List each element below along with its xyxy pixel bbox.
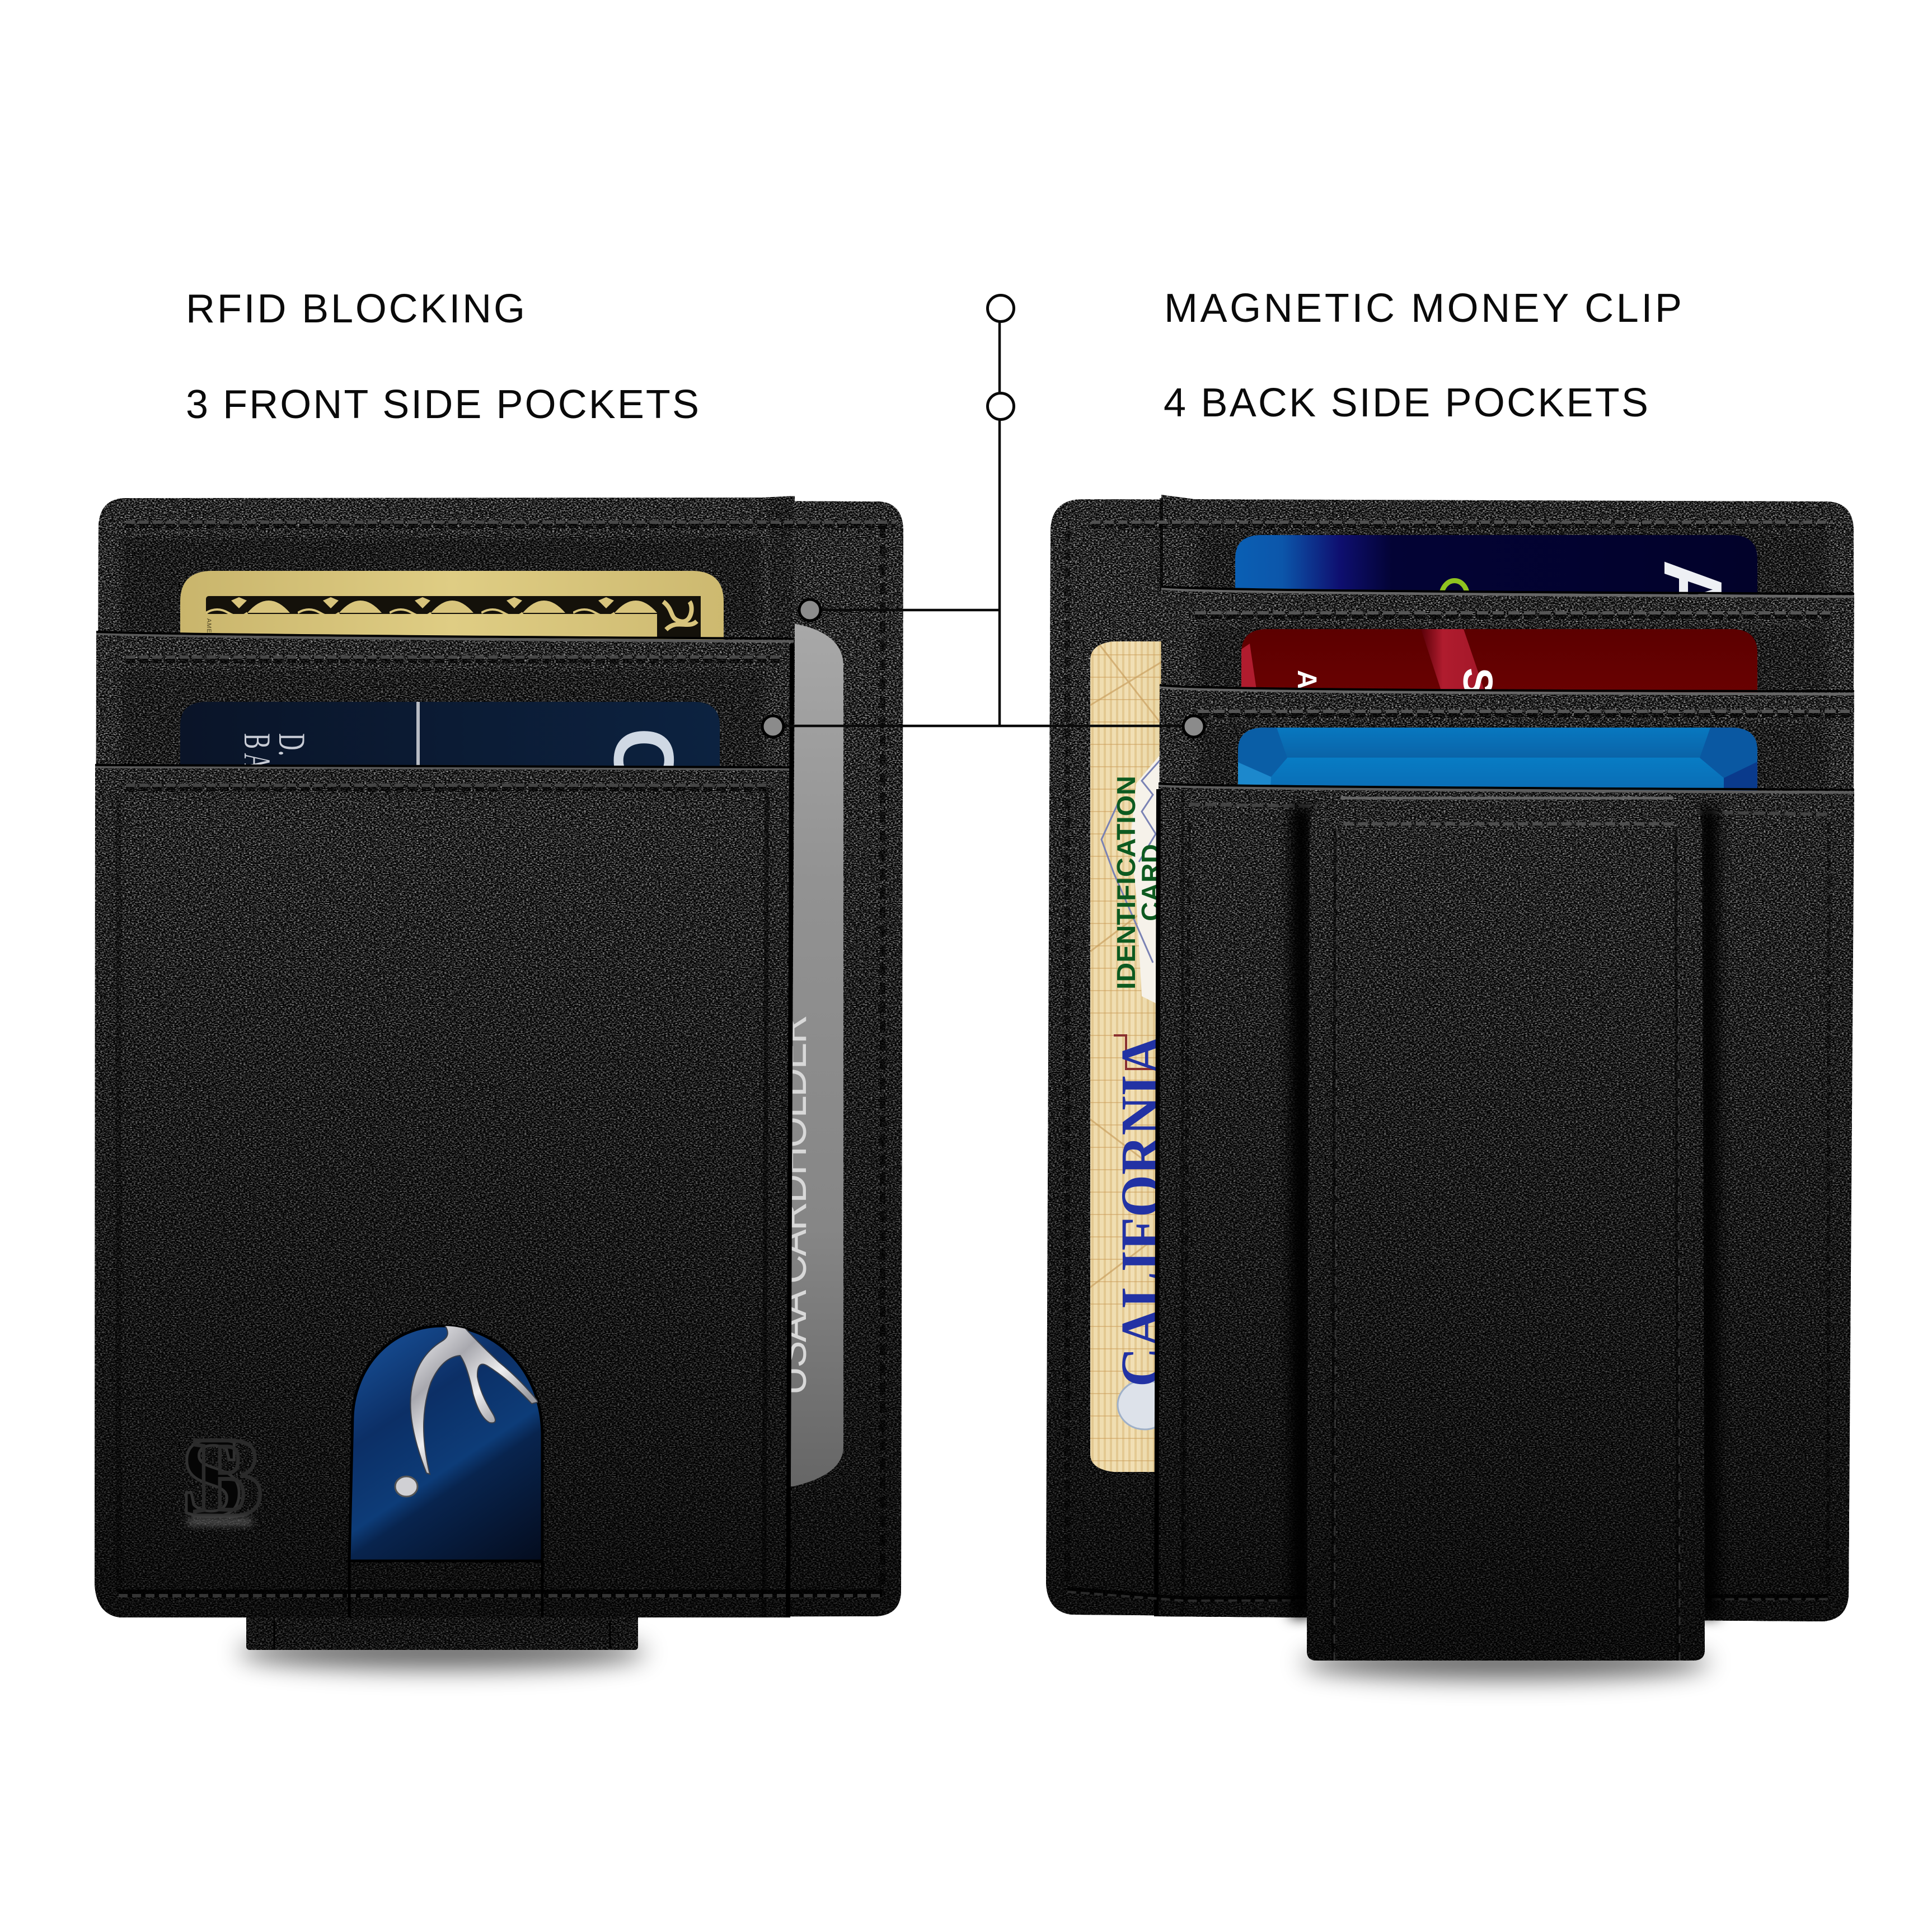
ID card title: IDENTIFICATION xyxy=(1112,776,1141,990)
heading: magnetic money clip: MAGNETIC MONEY CLIP xyxy=(1164,286,1682,331)
dark navy card: BA xyxy=(236,733,278,774)
connector lines and markers xyxy=(762,296,1204,737)
red card: S xyxy=(1455,668,1501,695)
embossed SB logo: B xyxy=(193,1414,263,1541)
middle front pocket xyxy=(95,632,794,1617)
embossed SB logo: S xyxy=(180,1414,244,1541)
thumb slot with blue card xyxy=(349,1324,542,1617)
silver card xyxy=(770,623,843,1486)
dark navy card xyxy=(180,702,720,797)
fold panel base xyxy=(1161,495,1854,599)
red card: A xyxy=(1292,670,1321,690)
connector line: vertical xyxy=(998,322,1001,727)
callout marker: lower ring xyxy=(987,393,1014,420)
right wallet: back side xyxy=(1046,495,1854,1679)
connector line: to lower rivets xyxy=(785,725,1182,727)
money clip shadow xyxy=(1301,1645,1710,1679)
clip tab shadow xyxy=(238,1635,646,1669)
silver card emblem xyxy=(395,1324,538,1497)
California ID card xyxy=(1090,641,1161,1472)
money clip tab xyxy=(246,1601,638,1650)
rivet: upper left xyxy=(799,599,820,621)
heading: RFID blocking: RFID BLOCKING xyxy=(186,287,525,331)
rivet: lower left xyxy=(762,716,784,737)
lower front pocket xyxy=(95,765,794,1617)
left wallet: front side xyxy=(95,496,903,1669)
back panel leather xyxy=(95,498,903,1617)
back panel leather xyxy=(1046,499,1854,1621)
state map area xyxy=(1131,756,1160,1003)
heading: 3 front side pockets: 3 FRONT SIDE POCKETS xyxy=(186,382,699,427)
silver card: USAA CARDHOLDER xyxy=(770,1015,815,1395)
gold card xyxy=(180,571,724,660)
connector line: to upper left rivet xyxy=(822,609,1000,611)
navy blue card: A xyxy=(1647,560,1739,620)
heading: 4 back side pockets: 4 BACK SIDE POCKETS xyxy=(1164,381,1648,425)
dark navy card: C xyxy=(596,728,691,789)
dark navy card: D. xyxy=(270,733,312,756)
clip side shadows xyxy=(1290,806,1719,1617)
blue card xyxy=(1238,728,1757,817)
ornate band xyxy=(206,596,701,638)
California ID card: CARD xyxy=(1136,844,1165,921)
callout marker: upper ring xyxy=(987,296,1014,321)
gold card: AMER xyxy=(205,618,212,639)
navy blue card xyxy=(1235,535,1757,620)
California ID card: CALIFORNIA xyxy=(1109,1035,1174,1387)
top front layer xyxy=(95,496,795,1617)
money clip xyxy=(1307,798,1705,1661)
rivet: right xyxy=(1183,716,1204,737)
pocket 1 xyxy=(1157,587,1854,1621)
state seal xyxy=(1118,1380,1171,1429)
pocket 3 xyxy=(1157,784,1854,1621)
red card xyxy=(1241,629,1757,716)
pocket 2 xyxy=(1157,685,1854,1621)
